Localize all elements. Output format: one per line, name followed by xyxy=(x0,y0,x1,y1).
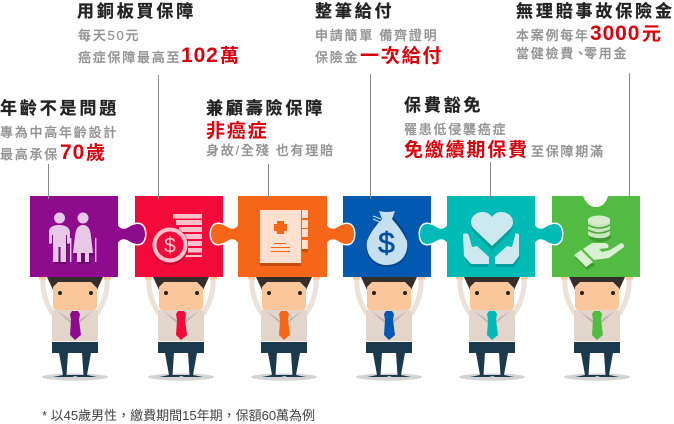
heading block: low budget coverage: 每天50元 xyxy=(78,28,140,43)
heading block: lump sum xyxy=(315,1,443,67)
heading block: premium waiver: 免繳續期保費 xyxy=(404,138,529,161)
heading block: lump sum: 一次給付 xyxy=(360,44,443,67)
heading block: low budget coverage: 102 xyxy=(181,44,219,67)
puzzle piece 6: green with top notch xyxy=(552,196,640,277)
heading block: low budget coverage: 癌症保障最高至 xyxy=(78,50,181,65)
heading block: no claim benefit: 無理賠事故保險金 xyxy=(516,1,674,21)
puzzle piece 5: teal with two tabs xyxy=(420,196,562,277)
heading block: lump sum: 整筆給付 xyxy=(315,1,394,21)
puzzle piece 2: red xyxy=(135,196,223,277)
heading block: age: 70 xyxy=(60,141,85,164)
icon: money bag xyxy=(366,211,408,267)
heading block: life coverage: 非癌症 xyxy=(206,119,268,142)
icon: coins and stack xyxy=(152,214,202,265)
heading block: no claim benefit: 當健檢費 xyxy=(516,46,575,61)
heading block: no claim benefit: 、 xyxy=(574,46,589,61)
heading block: lump sum: 申請簡單 備齊證明 xyxy=(315,28,438,43)
leader line 3 xyxy=(268,164,270,199)
leader line 6 xyxy=(628,73,630,199)
heading block: life coverage: 身故/全殘 也有理賠 xyxy=(206,143,335,158)
heading block: age: 年齡不是問題 xyxy=(0,98,119,118)
heading block: premium waiver: 罹患低侵襲癌症 xyxy=(404,122,507,137)
icon: heart and hands xyxy=(463,212,520,267)
icon: medical document xyxy=(260,210,308,266)
person 5 xyxy=(456,277,528,381)
heading block: lump sum: 保險金 xyxy=(315,50,359,65)
leader line 2 xyxy=(158,75,160,199)
person 6 xyxy=(561,277,633,381)
footnote: * 以45歲男性，繳費期間15年期，保額60萬為例 xyxy=(42,408,315,423)
leader line 5 xyxy=(490,162,492,199)
heading block: life coverage xyxy=(206,98,335,158)
heading block: age: 專為中高年齡設計 xyxy=(0,125,118,140)
icon: money bag: $ xyxy=(378,227,395,260)
heading block: premium waiver: 保費豁免 xyxy=(404,95,483,115)
heading block: age: 歲 xyxy=(86,142,107,164)
heading block: life coverage: 兼顧壽險保障 xyxy=(206,98,325,118)
icon: coins over hand xyxy=(574,216,624,270)
leader line 1 xyxy=(48,164,50,199)
heading block: no claim benefit xyxy=(516,1,674,61)
heading block: premium waiver: 至保障期滿 xyxy=(531,144,605,159)
heading block: age xyxy=(0,98,119,164)
puzzle piece 3: orange with two tabs xyxy=(211,196,354,277)
person 2 xyxy=(145,277,217,381)
heading block: low budget coverage: 萬 xyxy=(220,45,241,67)
heading block: low budget coverage: 用銅板買保障 xyxy=(77,1,196,21)
heading block: no claim benefit: 3000 xyxy=(590,22,640,45)
icon: elderly couple xyxy=(49,212,96,264)
heading block: low budget coverage xyxy=(77,1,241,67)
puzzle piece 4: blue xyxy=(343,196,431,277)
heading block: no claim benefit: 本案例每年 xyxy=(516,28,590,43)
heading block: premium waiver xyxy=(404,95,605,161)
person 3 xyxy=(248,277,320,381)
heading block: no claim benefit: 零用金 xyxy=(584,46,628,61)
person 1 xyxy=(39,277,111,381)
person 4 xyxy=(353,277,425,381)
leader line 4 xyxy=(370,74,372,199)
icon: coins and stack: $ xyxy=(164,234,176,258)
heading block: no claim benefit: 元 xyxy=(642,24,663,45)
puzzle piece 1: purple with tab xyxy=(30,196,145,277)
heading block: age: 最高承保 xyxy=(0,147,59,162)
